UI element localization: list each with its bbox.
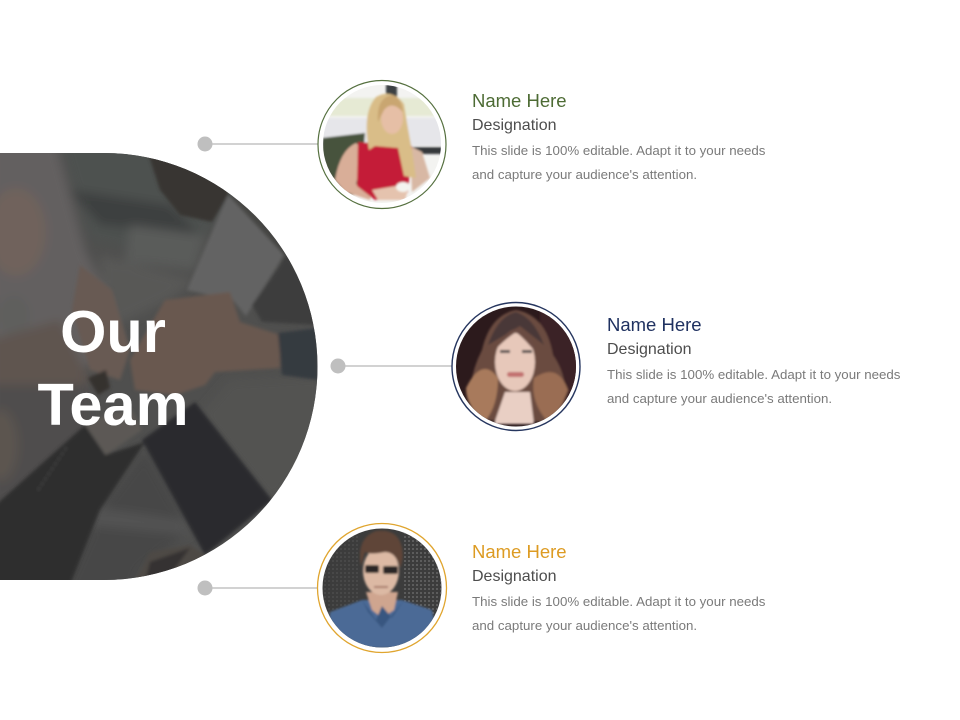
text block: bottom member: This slide is 100% editable. Adapt it to your needs [472, 594, 765, 609]
connector: bottom [198, 580, 318, 596]
text block: bottom member: Name Here [472, 541, 567, 562]
text block: middle member [607, 314, 900, 406]
text block: top member: Designation [472, 117, 556, 134]
panel: team photo half circle [0, 140, 320, 600]
title: Our [60, 298, 166, 365]
text block: middle member: and capture your audience's attention. [607, 391, 832, 406]
text block: bottom member [472, 541, 765, 633]
text block: middle member: This slide is 100% editable. Adapt it to your needs [607, 367, 900, 382]
text block: top member [472, 90, 765, 182]
text block: top member: and capture your audience's attention. [472, 167, 697, 182]
connector: top [198, 136, 318, 152]
title: Team [37, 371, 189, 438]
text block: top member: This slide is 100% editable. Adapt it to your needs [472, 143, 765, 158]
text block: bottom member: Designation [472, 568, 556, 585]
connector: middle [330, 358, 452, 374]
text block: middle member: Designation [607, 341, 692, 358]
text block: middle member: Name Here [607, 314, 702, 335]
portrait: woman in red dress [318, 80, 446, 208]
title [37, 298, 189, 438]
portrait: man with glasses [318, 524, 446, 652]
portrait: woman with curly hair [452, 302, 580, 430]
text block: top member: Name Here [472, 90, 567, 111]
text block: bottom member: and capture your audience's attention. [472, 618, 697, 633]
